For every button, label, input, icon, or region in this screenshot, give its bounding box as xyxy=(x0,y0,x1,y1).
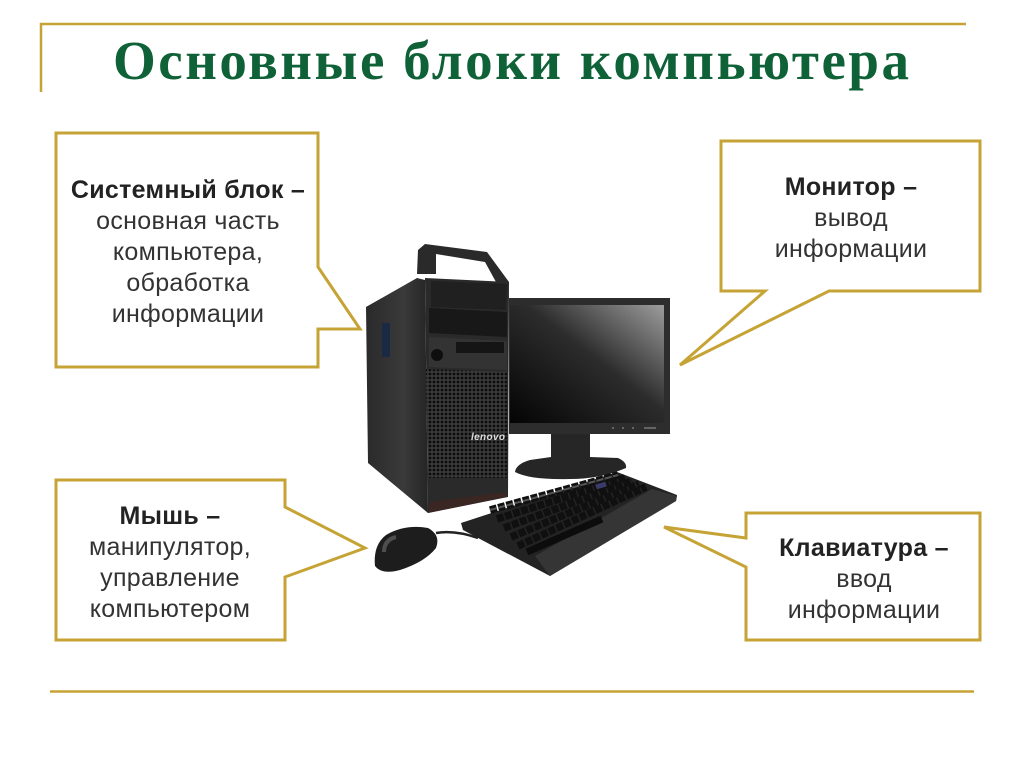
callout: keyboard xyxy=(664,513,980,640)
system unit xyxy=(366,244,509,513)
callout: system unit xyxy=(56,133,360,367)
bottom rule xyxy=(50,690,974,693)
callout: mouse xyxy=(56,480,365,640)
callout: system unit: Системный блок – xyxy=(71,176,305,204)
callout: keyboard: информации xyxy=(788,596,940,624)
title: Основные блоки компьютера xyxy=(113,30,909,91)
monitor xyxy=(509,298,670,479)
callout: keyboard: Клавиатура – xyxy=(779,534,949,562)
title frame xyxy=(41,24,966,92)
system unit: lenovo xyxy=(471,432,505,443)
keyboard xyxy=(461,472,677,576)
callout: system unit: компьютера, xyxy=(113,238,263,266)
callout: mouse: компьютером xyxy=(90,595,250,623)
callout: monitor: Монитор – xyxy=(785,173,917,201)
callout: monitor: информации xyxy=(775,235,927,263)
callout: mouse: манипулятор, xyxy=(89,533,251,561)
callout: mouse: Мышь – xyxy=(119,502,221,530)
callout: system unit: информации xyxy=(112,300,264,328)
mouse xyxy=(375,527,478,572)
callout: keyboard: ввод xyxy=(836,565,892,593)
callout: system unit: основная часть xyxy=(96,207,280,235)
callout: mouse: управление xyxy=(100,564,240,592)
callout: system unit: обработка xyxy=(126,269,250,297)
callout: monitor: вывод xyxy=(814,204,888,232)
callout: monitor xyxy=(680,141,980,365)
